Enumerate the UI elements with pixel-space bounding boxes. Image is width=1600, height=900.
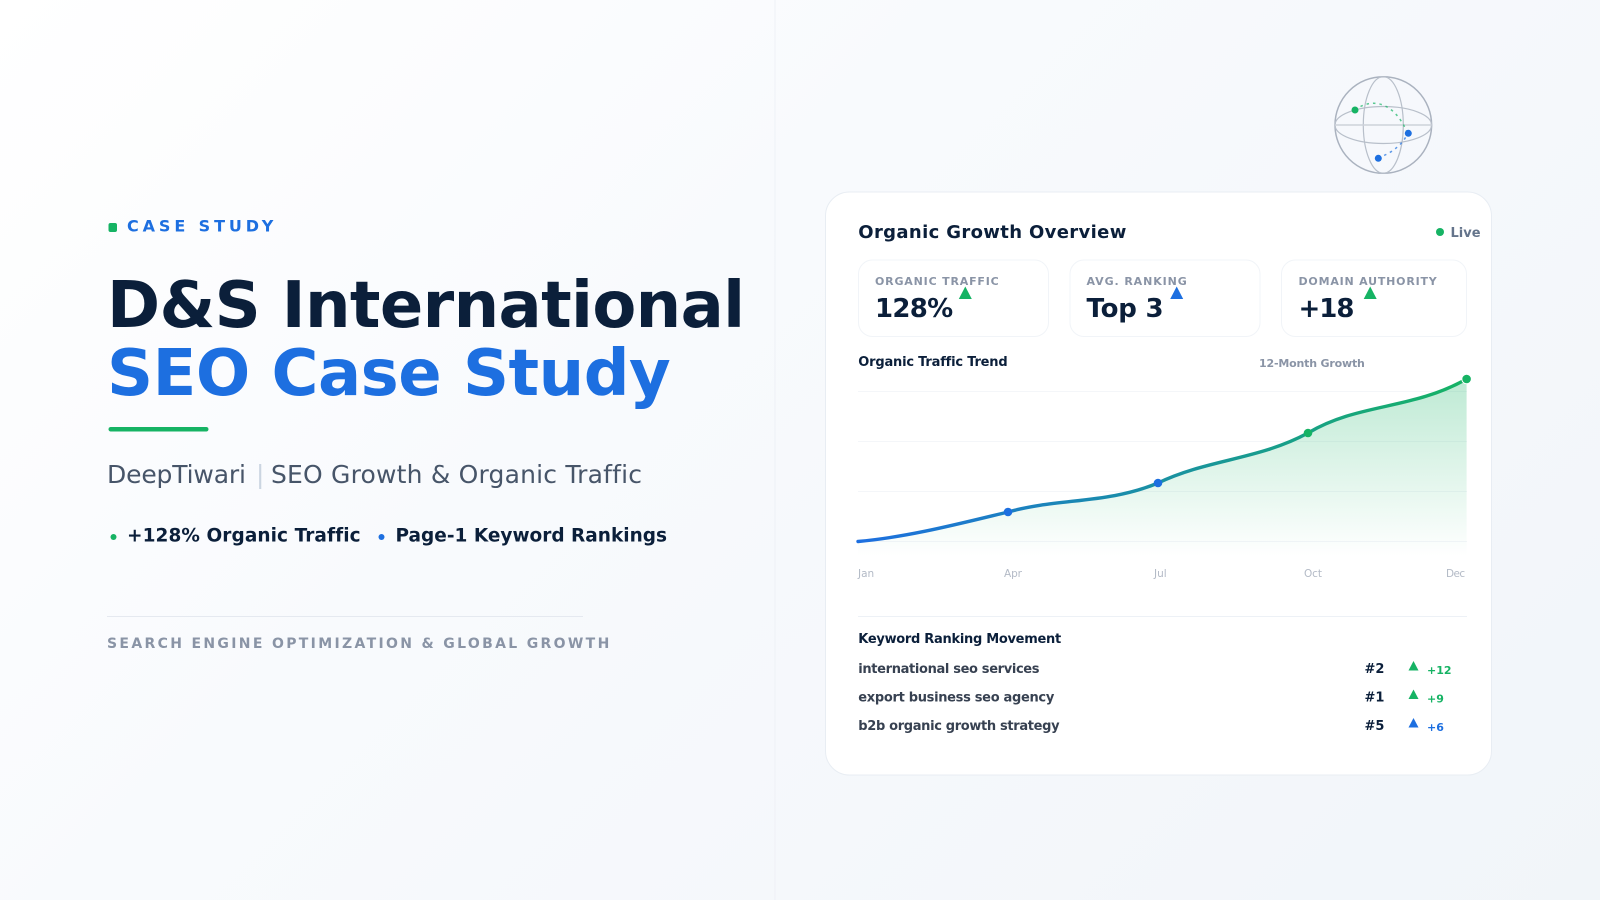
keyword row 2	[858, 690, 1444, 706]
keyword row 3: #5	[1364, 719, 1384, 734]
keyword row 2: +9	[1427, 692, 1444, 706]
chart x axis labels: Jan	[857, 568, 874, 580]
panel heading: Organic Growth Overview	[858, 222, 1127, 243]
stat card: domain authority: +18	[1298, 294, 1353, 324]
chart x axis labels: Apr	[1004, 568, 1023, 580]
subtitle: SEO Growth & Organic Traffic	[271, 460, 642, 489]
keyword row 2: export business seo agency	[858, 690, 1055, 706]
keyword row 1	[858, 661, 1452, 677]
highlights: Page-1 Keyword Rankings	[396, 526, 667, 546]
stat card: average ranking: Top 3	[1086, 294, 1163, 324]
stat card: organic traffic: ORGANIC TRAFFIC	[875, 275, 1000, 288]
panel: organic growth dashboard	[826, 192, 1492, 775]
keyword row 3: b2b organic growth strategy	[858, 719, 1060, 734]
keyword row 2: #1	[1364, 690, 1384, 706]
chart subtitle: 12-Month Growth	[1259, 357, 1365, 370]
heading	[107, 269, 744, 411]
keyword row 1: international seo services	[858, 662, 1040, 677]
stat card: organic traffic	[858, 260, 1048, 336]
line chart: organic traffic	[858, 374, 1471, 556]
keyword row 1: #2	[1364, 662, 1384, 677]
keyword table heading: Keyword Ranking Movement	[858, 632, 1061, 647]
chart x axis labels	[857, 568, 1465, 580]
heading: SEO Case Study	[107, 337, 670, 411]
subtitle: DeepTiwari	[107, 460, 246, 489]
stat card: average ranking: AVG. RANKING	[1086, 275, 1188, 288]
keyword row 3: +6	[1427, 721, 1444, 734]
highlights: +128% Organic Traffic	[127, 526, 361, 546]
chart x axis labels: Jul	[1153, 568, 1167, 580]
keyword row 1: +12	[1427, 664, 1452, 677]
live indicator	[1436, 226, 1481, 241]
left panel: title block	[107, 216, 744, 652]
stat card: average ranking	[1070, 260, 1260, 336]
stat card: domain authority: DOMAIN AUTHORITY	[1298, 275, 1438, 288]
eyebrow: case study: CASE STUDY	[127, 216, 277, 236]
subtitle: |	[256, 460, 264, 489]
highlights	[110, 526, 667, 546]
heading: D&S International	[107, 269, 744, 343]
accent bar	[108, 427, 208, 432]
chart heading: Organic Traffic Trend	[858, 355, 1007, 370]
stat card: organic traffic: 128%	[875, 294, 953, 324]
live indicator: Live	[1450, 226, 1481, 241]
chart x axis labels: Oct	[1304, 568, 1322, 580]
icon: wireframe globe	[1335, 77, 1432, 173]
chart x axis labels: Dec	[1446, 568, 1465, 580]
stat card: domain authority	[1282, 260, 1466, 336]
keyword row 3	[858, 718, 1444, 734]
footer tagline: SEARCH ENGINE OPTIMIZATION & GLOBAL GROWTH	[107, 636, 612, 652]
